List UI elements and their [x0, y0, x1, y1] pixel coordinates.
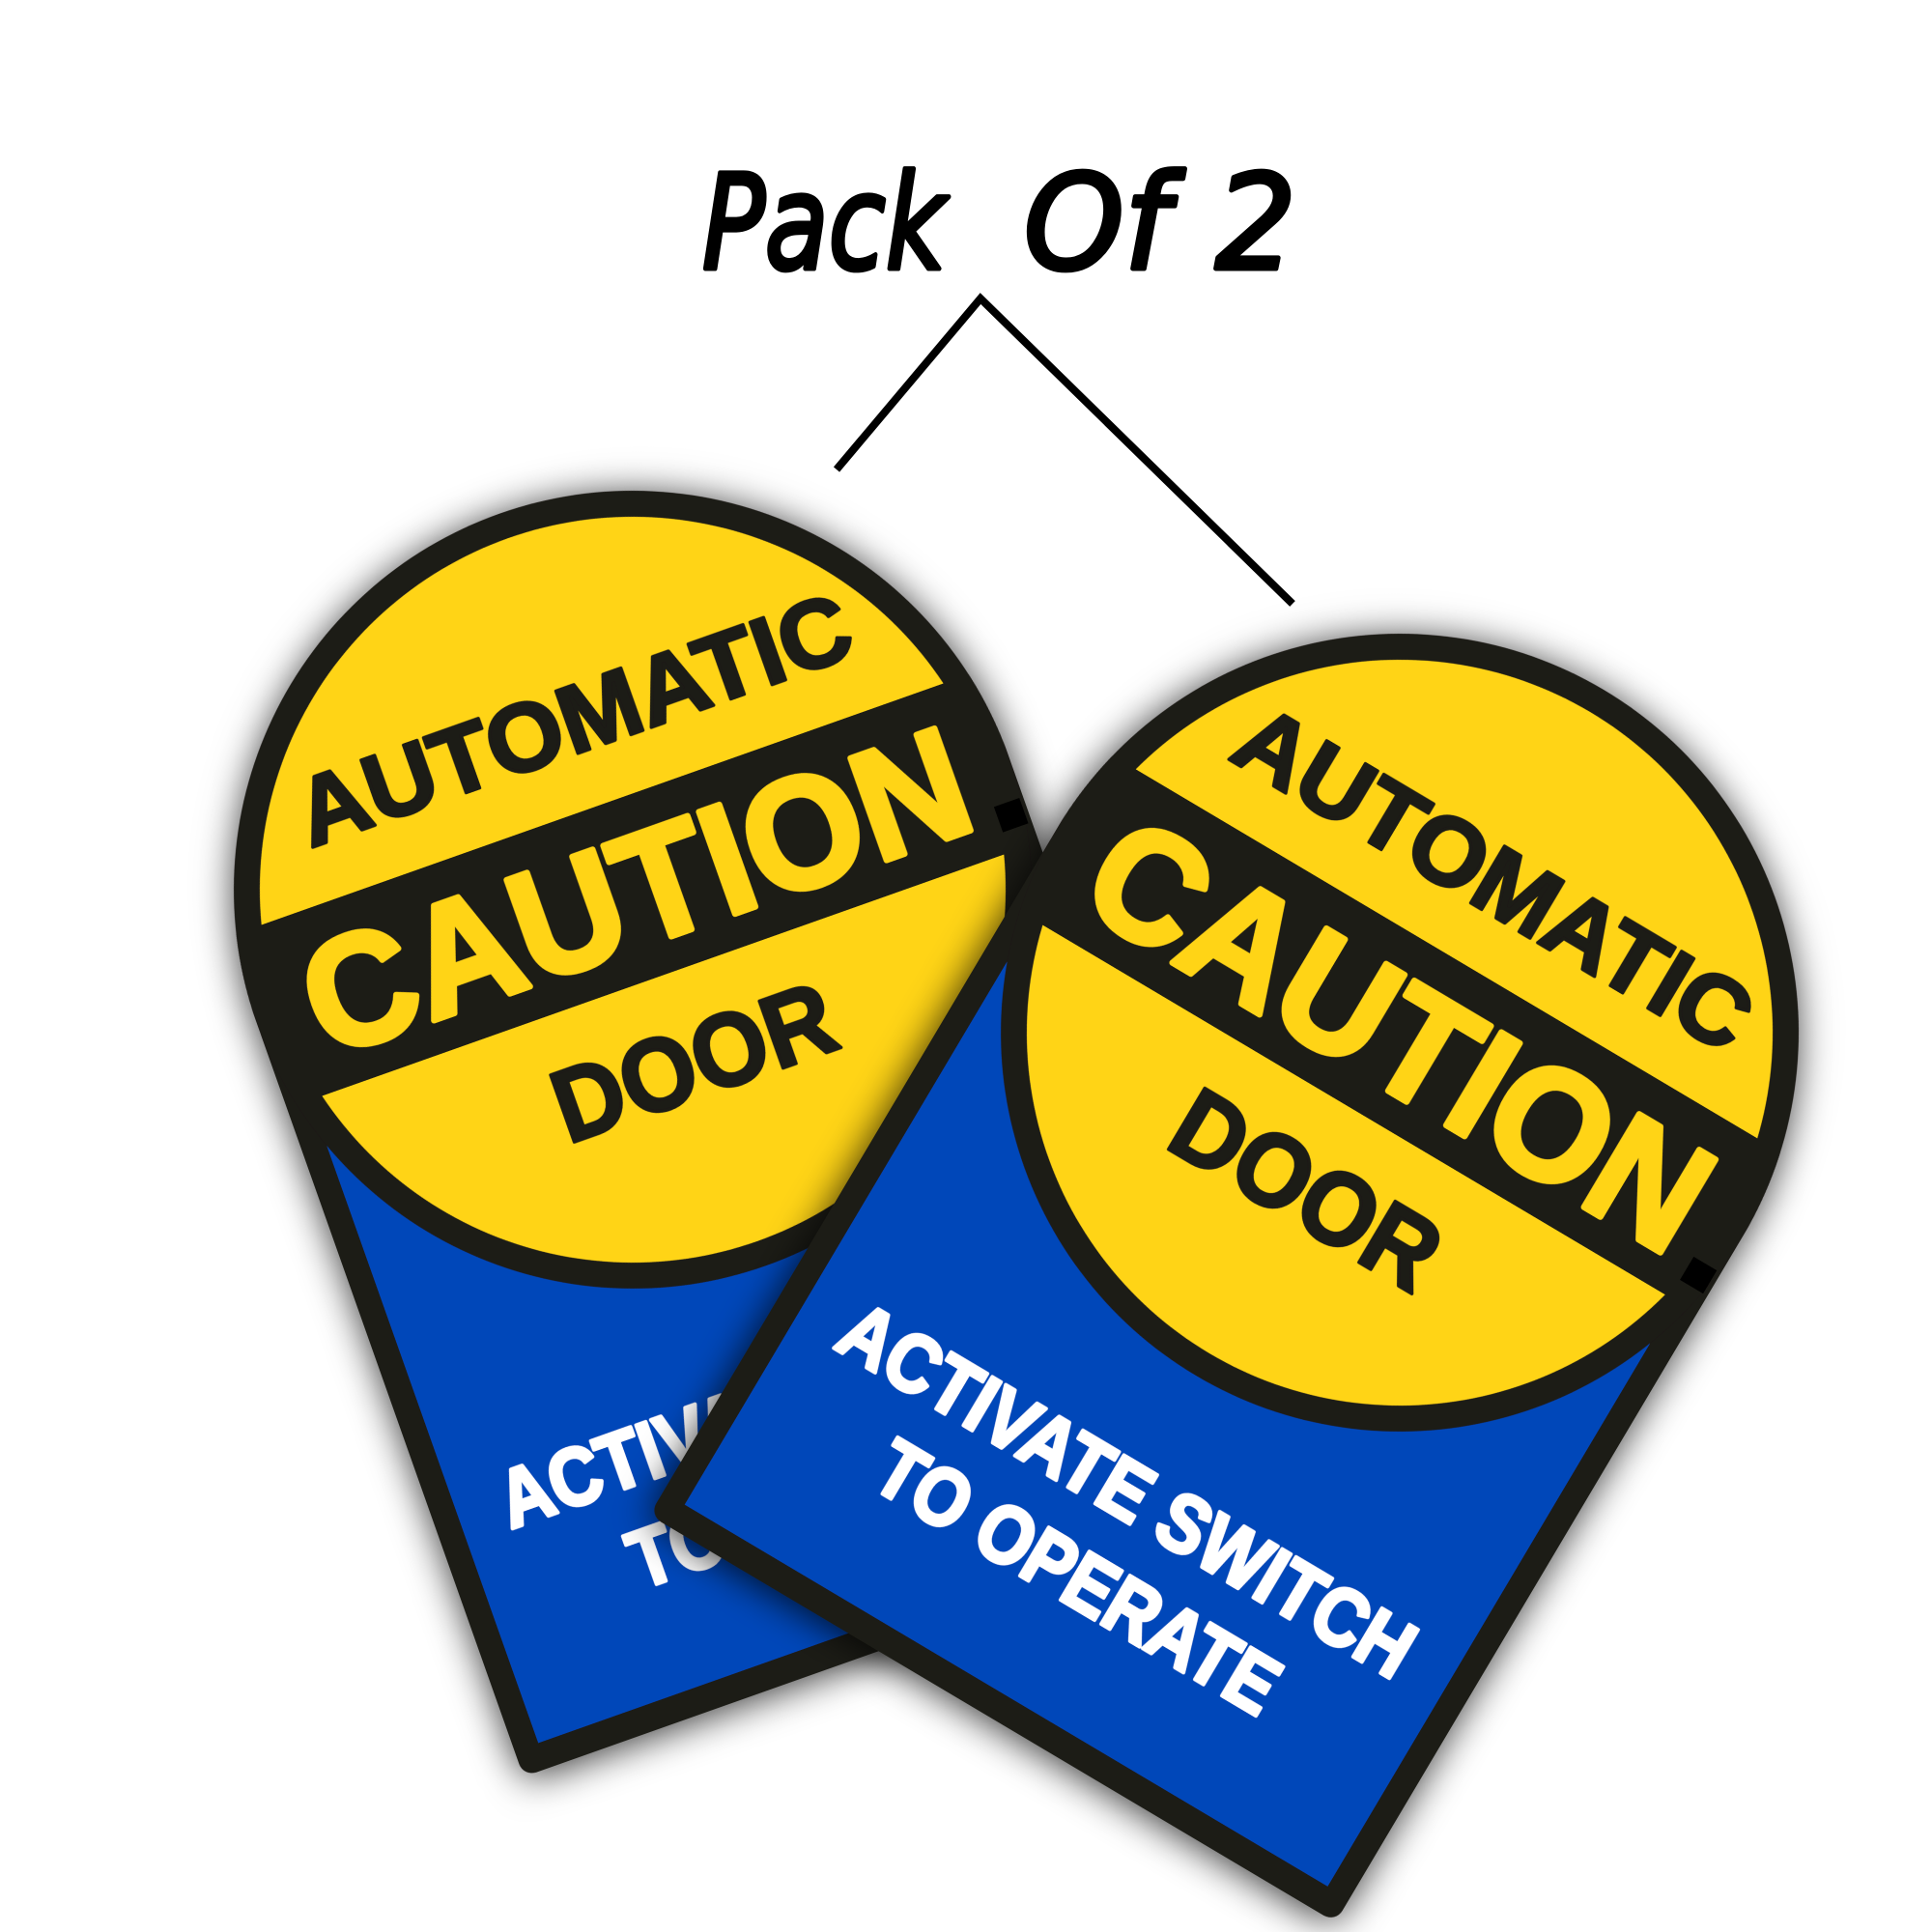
sticker 2 switch instruction text: ACTIVATE SWITCH — [823, 1284, 1431, 1695]
sticker 1 word: CAUTION: CAUTION — [279, 693, 992, 1091]
title: Pack Of 2 — [702, 148, 1296, 300]
sticker 1 word: AUTOMATIC: AUTOMATIC — [281, 572, 866, 867]
sticker 2: front right — [629, 606, 1828, 1932]
sticker 1 yellow circle — [156, 413, 1109, 1366]
sticker 2 word: AUTOMATIC: AUTOMATIC — [1216, 683, 1772, 1072]
sticker 1: back left — [204, 464, 1061, 1804]
sticker 1 switch instruction text: TO OPERATE — [616, 1369, 1074, 1606]
sticker 1 switch instruction text — [486, 1242, 1166, 1640]
sticker 1 circle outline — [124, 381, 1142, 1399]
title: Pack Of 2: Pack — [702, 148, 950, 300]
sticker 2 word: CAUTION: CAUTION — [1058, 781, 1743, 1287]
infographic canvas — [204, 166, 1828, 1932]
sticker 2 switch instruction text: TO OPERATE — [859, 1422, 1296, 1732]
sticker 1 blue panel — [280, 765, 1243, 1743]
sticker 2 yellow circle — [889, 522, 1911, 1544]
chevron bracket pointing to both stickers — [837, 298, 1293, 604]
title: Pack Of 2: Of — [1024, 148, 1186, 300]
sticker 1 registration mark — [994, 798, 1029, 833]
sticker 2 word: DOOR: DOOR — [1151, 1065, 1462, 1314]
sticker 2 circle outline — [853, 486, 1932, 1579]
sticker 2 black band — [1010, 750, 1790, 1314]
sticker 1 black band — [226, 671, 1039, 1108]
sticker 1 switch instruction text: ACTIVATE SWITCH — [486, 1242, 1132, 1546]
title: Pack Of 2: 2 — [1215, 148, 1296, 300]
sticker 2 black base — [649, 829, 1743, 1922]
sticker 1 black base — [257, 756, 1276, 1776]
sticker 2 blue panel — [685, 841, 1721, 1887]
sticker 1 word: DOOR: DOOR — [537, 958, 850, 1165]
sticker 2 registration mark — [1680, 1257, 1717, 1293]
